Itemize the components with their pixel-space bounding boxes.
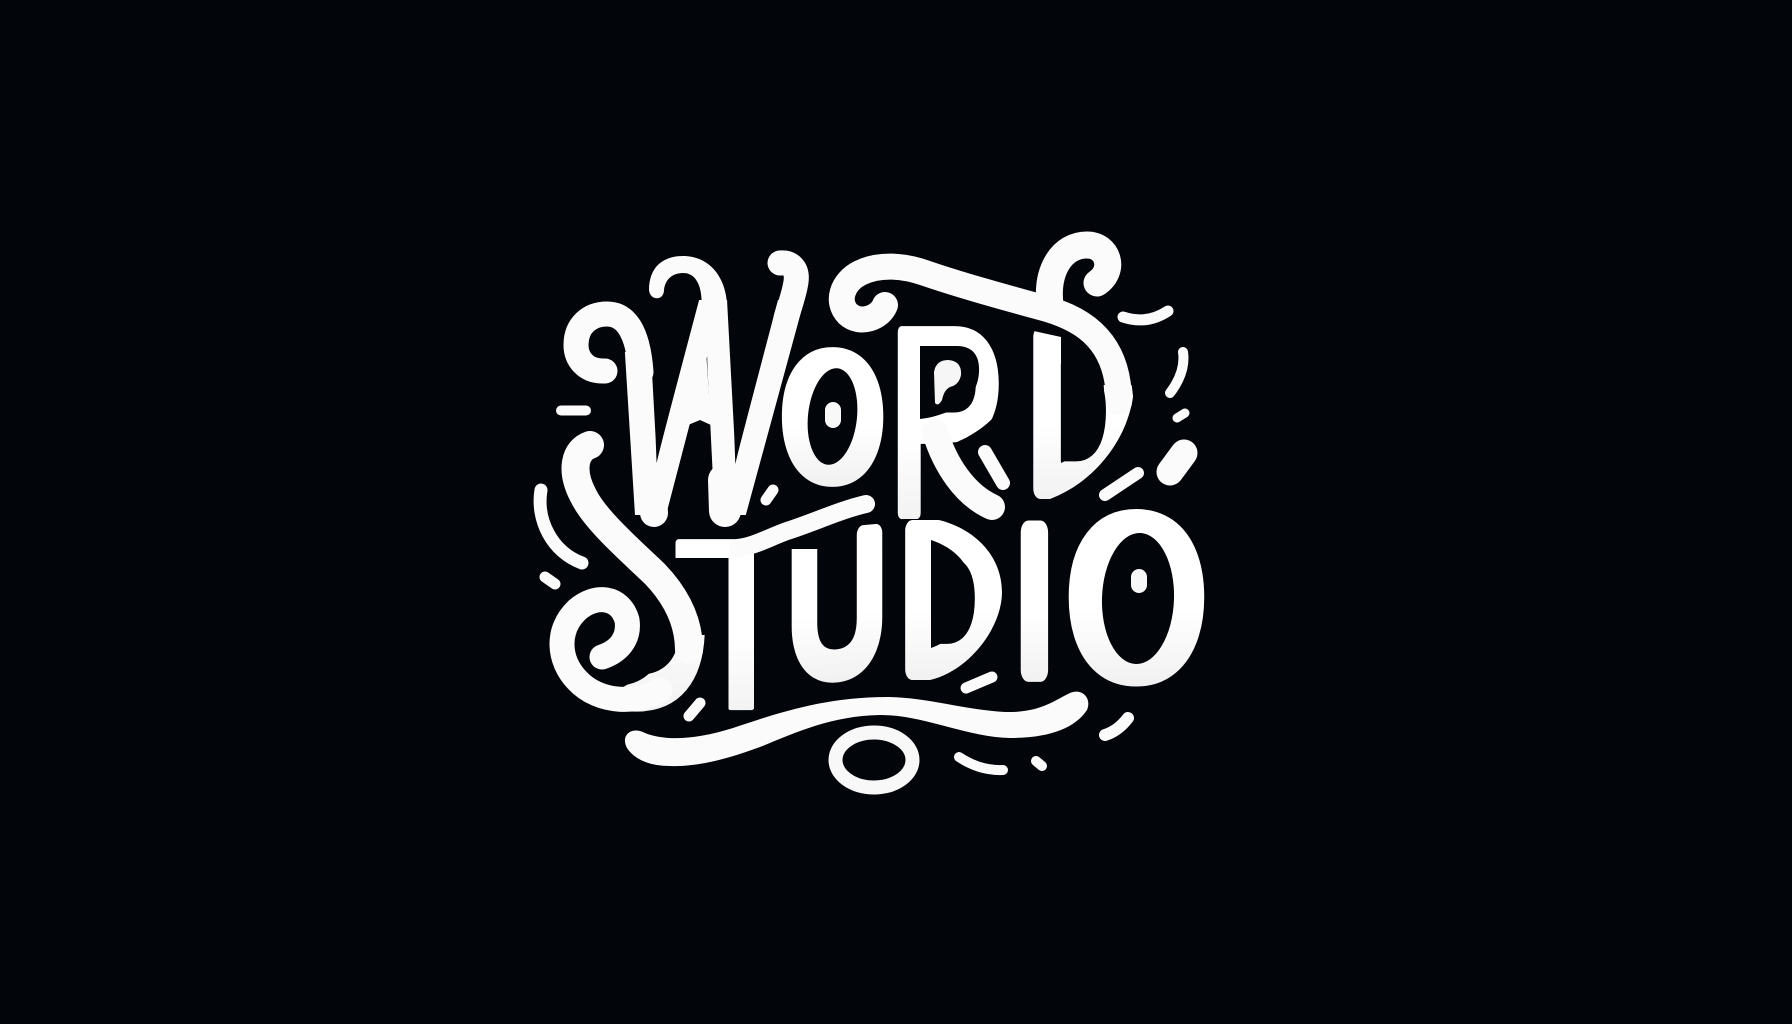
W middle join [688, 350, 711, 425]
W middle foot [724, 480, 725, 511]
mark: left dot [545, 577, 555, 584]
S counter [590, 610, 669, 686]
mark: tick lower right [1105, 718, 1128, 735]
O counter [1100, 532, 1176, 665]
O inner dot [1131, 569, 1147, 593]
mark: arc under swash [959, 757, 1003, 770]
mark: dash right of D [1105, 473, 1138, 495]
D counter [1061, 333, 1104, 463]
letter D: D [1028, 289, 1134, 536]
letter R: R [888, 275, 1007, 569]
logo: Word Studio lettering [534, 232, 1204, 794]
letter T: T [674, 492, 808, 757]
mark: right arc [1170, 352, 1183, 393]
D counter [931, 540, 972, 648]
O counter [803, 366, 862, 467]
flourish: W middle curl [649, 256, 727, 350]
O inner dot [825, 402, 841, 428]
flourish: D upper curl [1049, 245, 1108, 305]
mark: dash beside R leg [985, 452, 1003, 483]
mark: left arc [540, 490, 582, 563]
flourish: underline swash [625, 692, 1088, 766]
flourish: W left curl [576, 314, 641, 372]
mark: right small dot [1177, 413, 1185, 418]
decorative marks [540, 311, 1185, 770]
heading: STUDIO [558, 339, 1203, 790]
W left foot [652, 485, 654, 513]
letter O: O [784, 324, 881, 511]
flourish: S lower spiral [562, 600, 660, 699]
letter S: S [558, 339, 713, 790]
mark: dot under swash [1036, 761, 1042, 766]
letter O: O [1070, 477, 1203, 719]
flourish: T bar extension [738, 504, 866, 548]
letter W: W [593, 217, 813, 592]
mark: tick under S [689, 703, 700, 716]
letter U: U [787, 490, 886, 717]
mark: dash under D [966, 677, 992, 688]
mark: tick under W [766, 490, 773, 500]
flourish: S spine and top tail [576, 445, 689, 650]
flourish: D top sweep [842, 267, 1119, 402]
letter D: D [901, 487, 1002, 713]
R counter [920, 346, 979, 419]
mark: dash left of W [561, 406, 586, 416]
flourish: R curved leg [935, 432, 992, 507]
flourish: underline ellipse [836, 732, 912, 788]
heading: WORD [564, 232, 1133, 527]
R inner teardrop [934, 360, 961, 404]
flourish: W right terminal [780, 263, 796, 318]
mark: right blob [1170, 453, 1184, 472]
letter I: I [1016, 489, 1052, 713]
mark: top right arc [1123, 311, 1168, 320]
